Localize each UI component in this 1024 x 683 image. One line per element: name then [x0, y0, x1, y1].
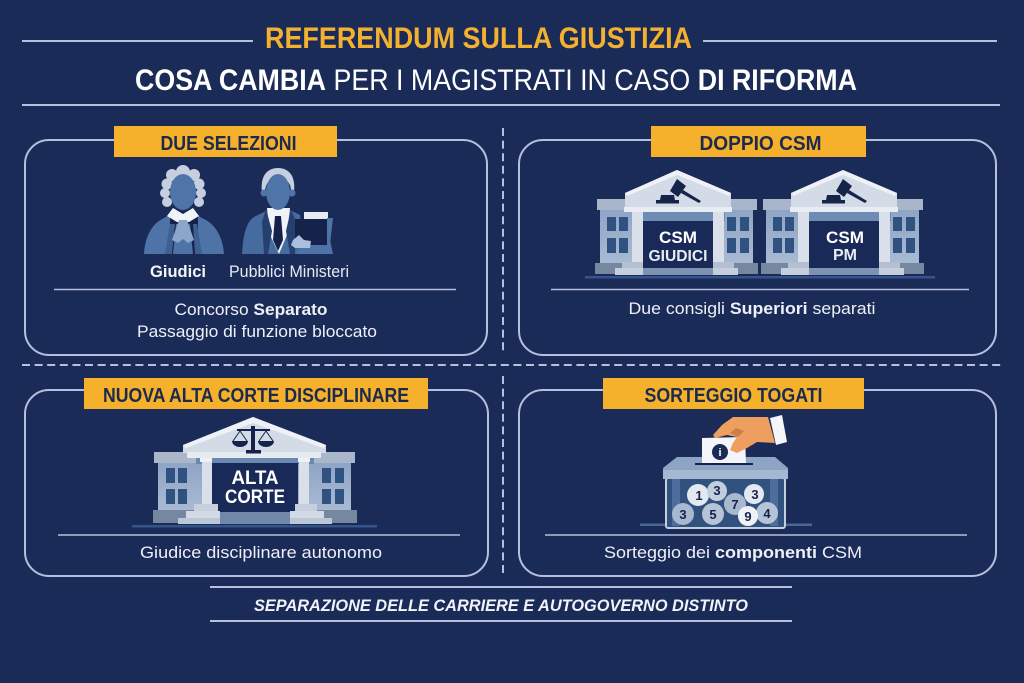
panel: due selezioni [25, 126, 487, 355]
balls: 1 [695, 488, 703, 503]
icon: urna con mano [640, 415, 812, 528]
icon: edificio alta corte [132, 417, 377, 528]
subtitle: COSA CAMBIA PER I MAGISTRATI IN CASO DI RIFORMA [135, 64, 857, 97]
icon: edificio csm giudici [595, 170, 758, 275]
footer banner: SEPARAZIONE DELLE CARRIERE E AUTOGOVERNO DISTINTO [254, 596, 748, 615]
title: REFERENDUM SULLA GIUSTIZIA [265, 22, 692, 55]
balls: 5 [709, 507, 717, 522]
panel: sorteggio togati [519, 378, 996, 576]
icon: edificio alta corte: CORTE [225, 486, 285, 508]
heading: sorteggio togati [603, 378, 864, 409]
text block: giudice disciplinare: Giudice disciplinare autonomo [140, 543, 382, 562]
icon: edificio csm pm: PM [833, 247, 857, 264]
heading: nuova alta corte: NUOVA ALTA CORTE DISCIPLINARE [103, 385, 409, 407]
text block: concorso [137, 300, 377, 341]
icon: edificio csm pm [761, 170, 924, 275]
label: pubblici ministeri: Pubblici Ministeri [229, 263, 349, 281]
text block: due consigli: Due consigli Superiori separati [628, 299, 876, 318]
heading: sorteggio togati: SORTEGGIO TOGATI [644, 385, 822, 407]
icon: pubblico ministero [242, 168, 333, 254]
heading: doppio csm: DOPPIO CSM [700, 133, 822, 155]
text block: concorso: Concorso Separato [174, 300, 328, 319]
balls: 3 [713, 483, 721, 498]
icon: edificio csm giudici: GIUDICI [648, 248, 708, 265]
panel: doppio csm [519, 126, 996, 355]
icon: bilancia [232, 426, 274, 454]
balls: 4 [763, 506, 771, 521]
icon: edificio csm pm: CSM [826, 228, 864, 247]
text block: concorso: Passaggio di funzione bloccato [137, 322, 377, 341]
balls: 3 [679, 507, 687, 522]
icon: edificio csm giudici: CSM [659, 228, 697, 247]
heading: doppio csm [651, 126, 866, 157]
text block: sorteggio componenti: Sorteggio dei componenti CSM [604, 543, 862, 562]
panel: nuova alta corte disciplinare [25, 378, 488, 576]
label: giudici: Giudici [150, 263, 206, 281]
heading: nuova alta corte [84, 378, 428, 409]
balls: 9 [744, 509, 752, 524]
icon: urna con mano: i [718, 447, 722, 459]
balls [672, 481, 778, 526]
balls: 7 [731, 497, 739, 512]
icon: giudice [144, 165, 224, 254]
icon: edificio alta corte: ALTA [232, 467, 278, 489]
heading: due selezioni [114, 126, 337, 157]
balls: 3 [751, 487, 759, 502]
heading: due selezioni: DUE SELEZIONI [160, 133, 296, 155]
